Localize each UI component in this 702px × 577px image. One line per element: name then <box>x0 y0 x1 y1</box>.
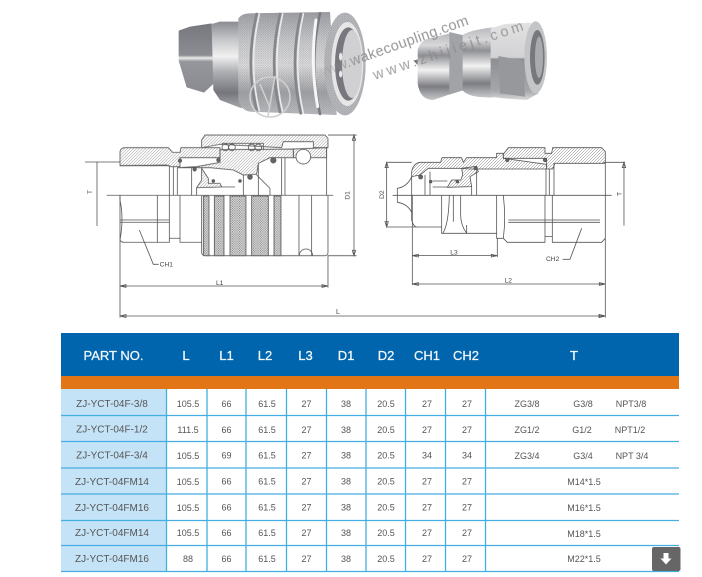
hatched section <box>120 135 328 188</box>
lower half outline <box>397 195 605 242</box>
orange divider band <box>61 376 679 389</box>
row 3: 105.5 <box>177 451 199 461</box>
row 3 <box>76 450 648 462</box>
row 6: 27 <box>301 528 312 538</box>
hatched section <box>412 148 605 187</box>
download button icon <box>652 547 680 571</box>
table header band: D1 <box>338 348 354 363</box>
dimension T left: T <box>87 190 94 194</box>
row 6: 20.5 <box>377 528 395 538</box>
table header band: L3 <box>298 348 313 363</box>
row 6: 27 <box>422 528 432 538</box>
sleeve ridges <box>251 13 320 114</box>
table header band <box>61 333 679 376</box>
technical drawing: plug section: CH2 <box>546 256 560 263</box>
groove <box>449 32 464 95</box>
leader CH2 <box>563 228 582 259</box>
row 5: M16*1.5 <box>567 503 601 513</box>
row 1: 66 <box>221 399 232 409</box>
row 6: 105.5 <box>177 528 199 538</box>
row 3: 61.5 <box>258 450 276 460</box>
row 1: 27 <box>422 399 432 409</box>
spec table <box>61 333 679 572</box>
internal details <box>397 163 605 195</box>
row 1: 38 <box>341 399 351 409</box>
row 3: 20.5 <box>377 450 395 460</box>
row 7: 38 <box>341 554 351 564</box>
dimension T <box>603 162 626 226</box>
row 7: 66 <box>221 554 232 564</box>
technical drawing: plug section: D2 <box>379 190 386 199</box>
dimension T left <box>85 162 120 226</box>
row 4: 20.5 <box>377 476 395 486</box>
row 6: 27 <box>462 528 472 538</box>
table header band: L2 <box>258 348 272 363</box>
row 4 <box>75 476 601 488</box>
technical drawing: plug section: L3 <box>450 249 458 256</box>
row 1: ZG3/8 <box>514 399 540 409</box>
row 1 <box>76 399 646 410</box>
table header band: PART NO. <box>84 348 143 363</box>
row 5: 20.5 <box>377 502 395 512</box>
row 6: M18*1.5 <box>567 529 601 539</box>
row 5: 38 <box>341 502 351 512</box>
table grid <box>61 389 679 572</box>
plug body <box>463 27 494 97</box>
row 7: 27 <box>301 554 312 564</box>
row 7: M22*1.5 <box>567 554 601 564</box>
row 6: ZJ-YCT-04FM14 <box>75 528 149 539</box>
table header band: L <box>182 348 190 363</box>
part number column <box>61 389 166 572</box>
sleeve front <box>324 13 366 115</box>
table header band: T <box>570 348 578 363</box>
watermark text: wakecoupling: www.wakecoupling.com <box>313 13 471 82</box>
row 3: 34 <box>422 450 432 460</box>
row 2 <box>76 424 645 436</box>
row 1: 61.5 <box>258 399 276 409</box>
row 2: 61.5 <box>258 425 276 435</box>
technical drawing: plug section: T <box>617 192 624 196</box>
row 1: 20.5 <box>377 399 395 409</box>
leader CH1 <box>139 230 159 264</box>
row 2: 27 <box>422 425 432 435</box>
center line <box>393 194 612 197</box>
row 3: NPT 3/4 <box>616 451 648 461</box>
plug nose <box>418 33 451 100</box>
row 7: 61.5 <box>258 554 276 564</box>
row 2: 111.5 <box>177 425 199 435</box>
photo: quick coupling socket <box>179 12 366 115</box>
row 4: 105.5 <box>177 477 199 487</box>
dimension L overall: L <box>336 309 340 316</box>
dimension L1 <box>120 195 328 318</box>
row 5: 27 <box>301 502 312 512</box>
seals <box>419 175 423 179</box>
row 4: 27 <box>301 476 312 486</box>
row 2: NPT1/2 <box>615 425 645 435</box>
row 5 <box>75 502 601 514</box>
row 1: NPT3/8 <box>616 399 646 409</box>
hex nut <box>179 23 214 93</box>
row 2: G1/2 <box>572 425 592 435</box>
table header band: CH2 <box>453 348 479 363</box>
row 2: 20.5 <box>377 425 395 435</box>
row 2: 38 <box>341 425 351 435</box>
row 3: 69 <box>221 450 232 460</box>
technical drawing: socket section: D1 <box>345 191 352 200</box>
technical drawing: socket section <box>107 135 357 318</box>
row 2: 66 <box>221 425 232 435</box>
row 5: 66 <box>221 502 232 512</box>
row 4: 66 <box>221 476 232 486</box>
row 2: ZG1/2 <box>514 425 540 435</box>
internal details <box>120 143 327 195</box>
row 7: 88 <box>183 554 193 564</box>
threaded port <box>524 21 547 93</box>
row 1: 27 <box>462 399 472 409</box>
row 4: 27 <box>462 476 472 486</box>
row 4: ZJ-YCT-04FM14 <box>75 477 149 488</box>
row 2: 27 <box>301 425 312 435</box>
table header band: L1 <box>219 348 234 363</box>
row 7: 27 <box>462 554 472 564</box>
dimension D2 <box>385 162 417 227</box>
table header band: CH1 <box>414 348 440 363</box>
center line <box>107 194 333 197</box>
row 3: 27 <box>301 450 312 460</box>
technical drawing: plug section: L2 <box>505 277 512 284</box>
dimension L overall <box>120 309 605 318</box>
row 1: ZJ-YCT-04F-3/8 <box>76 399 148 410</box>
table header band: D2 <box>378 348 394 363</box>
seals <box>178 159 182 162</box>
row 2: 27 <box>462 425 472 435</box>
row 7: 20.5 <box>377 554 395 564</box>
row 4: 61.5 <box>258 476 276 486</box>
row 5: 27 <box>462 502 472 512</box>
technical drawing: socket section: L1 <box>216 280 224 287</box>
row 4: M14*1.5 <box>567 477 601 487</box>
row 7: 27 <box>422 554 432 564</box>
row 1: G3/8 <box>573 399 593 409</box>
row 5: 27 <box>422 502 432 512</box>
row 3: ZG3/4 <box>514 451 540 461</box>
locking ball <box>296 149 311 164</box>
row 3: 38 <box>341 450 351 460</box>
row 6: 66 <box>221 528 232 538</box>
knurled sleeve <box>238 12 337 115</box>
row 5: 61.5 <box>258 502 276 512</box>
row 5: 105.5 <box>177 503 199 513</box>
row 2: ZJ-YCT-04F-1/2 <box>76 424 148 436</box>
table rows <box>75 399 648 565</box>
row 3: ZJ-YCT-04F-3/4 <box>76 450 148 462</box>
row 7 <box>75 554 601 565</box>
technical drawing: socket section: CH1 <box>160 262 173 269</box>
row 4: 38 <box>341 476 351 486</box>
dimension L3 <box>412 195 497 285</box>
row 3: 34 <box>462 450 472 460</box>
row 1: 27 <box>301 399 312 409</box>
watermark text: zhijiejt: www.zhijiejt.com <box>370 18 529 84</box>
row 5: ZJ-YCT-04FM16 <box>75 503 149 514</box>
row 6: 61.5 <box>258 528 276 538</box>
row 6 <box>75 528 601 539</box>
row 3: G3/4 <box>573 451 593 461</box>
dimension L2 <box>412 238 605 318</box>
row 1: 105.5 <box>177 399 199 409</box>
dimension D1 <box>328 135 357 256</box>
hex nut <box>491 23 538 100</box>
row 6: 38 <box>341 528 351 538</box>
knurled bands <box>203 196 281 256</box>
photo: quick coupling plug <box>413 21 547 100</box>
technical drawing: plug section <box>379 148 626 318</box>
neck <box>212 22 242 108</box>
watermark logo <box>250 76 290 117</box>
row 7: ZJ-YCT-04FM16 <box>75 554 149 565</box>
lower half outline <box>120 195 328 256</box>
row 4: 27 <box>422 476 432 486</box>
